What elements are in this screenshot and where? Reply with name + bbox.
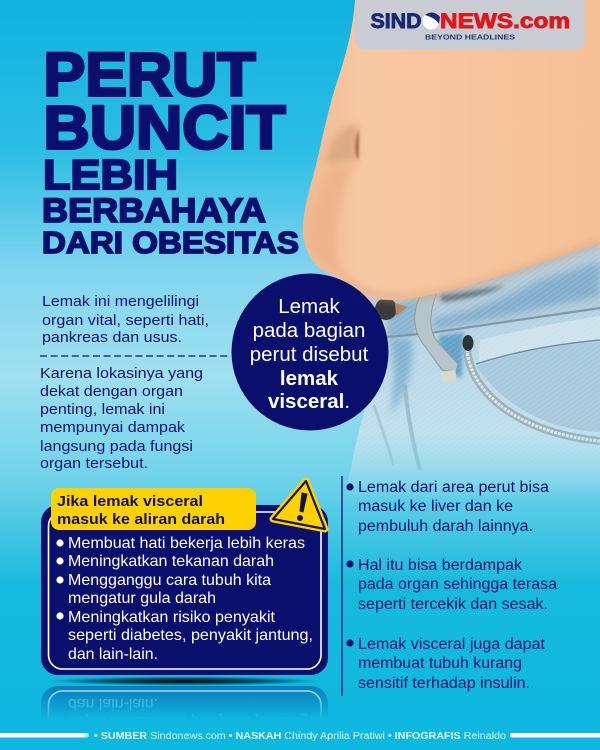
text block: dampak lemak perut: Hal itu bisa berdampak (358, 557, 522, 574)
text block: lokasi lemak: dekat dengan organ (40, 383, 183, 400)
list: dampak: Mengganggu cara tubuh kita (68, 572, 271, 589)
panel: risiko lemak visceral (41, 481, 328, 675)
list: dampak: Meningkatkan risiko penyakit (68, 609, 276, 626)
text block: dampak lemak perut: pembuluh darah lainnya. (358, 518, 533, 535)
title: DARI OBESITAS (42, 225, 299, 260)
list: dampak: Meningkatkan tekanan darah (68, 553, 274, 570)
text block: lokasi lemak: langsung pada fungsi (40, 438, 193, 455)
title: PERUT (44, 40, 256, 108)
logo: SINDOnews header (355, 0, 585, 50)
text block: dampak lemak perut: Lemak visceral juga dapat (358, 636, 546, 653)
title: LEBIH (43, 151, 178, 198)
callout: lemak visceral circle: perut disebut (250, 343, 369, 366)
panel heading: jika lemak visceral: Jika lemak visceral (57, 493, 203, 510)
text block: dampak lemak perut: membuat tubuh kurang (358, 655, 522, 672)
text block: dampak lemak perut: sensitif terhadap insulin. (358, 675, 530, 692)
photo: jeans (345, 238, 600, 500)
callout: lemak visceral circle: visceral. (268, 390, 350, 413)
text block: dampak lemak perut: seperti tercekik dan sesak. (358, 596, 548, 613)
photo: bare belly (303, 0, 600, 300)
text block: organ vital: Lemak ini mengelilingi (42, 293, 199, 310)
text block: dampak lemak perut: Lemak dari area perut bisa (358, 479, 549, 496)
logo wordmark: SIND: SIND (370, 10, 422, 33)
logo tagline: BEYOND HEADLINES (425, 32, 515, 42)
text block: organ vital: pankreas dan usus. (42, 329, 182, 346)
list: dampak: dan lain-lain. (68, 646, 158, 663)
text block: dampak lemak perut: pada organ sehingga terasa (358, 576, 557, 593)
callout: lemak visceral circle: lemak (280, 367, 339, 390)
logo wordmark: NEWS.com: NEWS.com (440, 10, 570, 33)
text block: lokasi lemak: Karena lokasinya yang (40, 365, 203, 382)
text block: dampak lemak perut: masuk ke liver dan ke (358, 498, 513, 515)
title (42, 40, 299, 260)
title: BUNCIT (44, 94, 286, 162)
text block: lokasi lemak: organ tersebut. (40, 455, 148, 472)
list: dampak: Membuat hati bekerja lebih keras (68, 535, 305, 552)
text block: lokasi lemak: penting, lemak ini (40, 401, 165, 418)
callout: lemak visceral circle (232, 274, 388, 430)
text block: organ vital (42, 293, 209, 346)
panel reflection: dan lain-lain. (68, 695, 158, 712)
panel shadow (49, 676, 319, 686)
callout: lemak visceral circle: Lemak (278, 295, 341, 318)
footer credits (0, 731, 600, 742)
title: BERBAHAYA (42, 192, 266, 230)
footer credits: • SUMBER Sindonews.com • NASKAH Chindy Aprilia Pratiwi • INFOGRAFIS Reinaldo (94, 731, 506, 742)
panel reflection: seperti diabetes, penyakit jantung, (68, 713, 313, 730)
panel heading: jika lemak visceral: masuk ke aliran darah (57, 511, 225, 528)
logo mark: globe (422, 12, 440, 30)
callout: lemak visceral circle: pada bagian (253, 319, 365, 342)
list: dampak (56, 535, 313, 663)
icon: warning triangle (273, 481, 325, 529)
text block: organ vital: organ vital, seperti hati, (42, 312, 209, 329)
text block: dampak lemak perut (342, 476, 557, 696)
list: dampak: mengatur gula darah (68, 590, 216, 607)
text block: lokasi lemak (40, 365, 203, 472)
text block: lokasi lemak: mempunyai dampak (40, 419, 186, 436)
panel heading: jika lemak visceral (51, 488, 256, 530)
list: dampak: seperti diabetes, penyakit jantung, (68, 627, 313, 644)
panel reflection (41, 686, 328, 718)
